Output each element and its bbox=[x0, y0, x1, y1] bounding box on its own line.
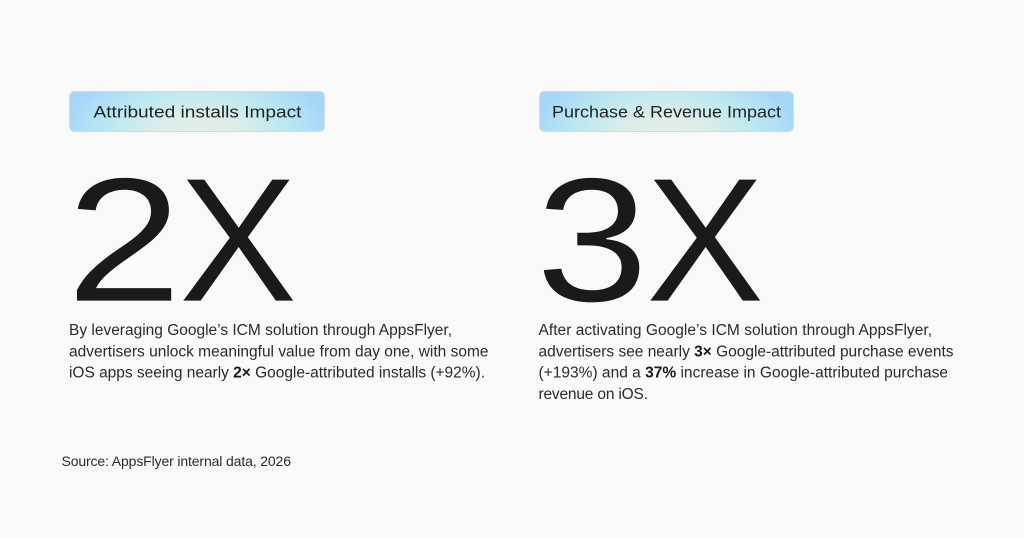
big number: 2X: X bbox=[178, 141, 298, 339]
big number: 3X: 3 bbox=[536, 141, 649, 339]
badge: attributed installs impact: Attributed installs Impact bbox=[94, 102, 302, 122]
text block: purchase description: (+193%) and a 37% increase in Google-attributed purchase bbox=[538, 365, 948, 382]
text block: purchase description: After activating Google’s ICM solution through AppsFlyer, bbox=[538, 322, 932, 339]
text block: installs description: advertisers unlock meaningful value from day one, with some bbox=[69, 343, 488, 360]
text block: installs description: iOS apps seeing nearly 2× Google-attributed installs (+92%). bbox=[69, 365, 485, 382]
panel: attributed installs impact bbox=[66, 92, 488, 382]
big number: 2X: 2 bbox=[66, 142, 182, 339]
text block: purchase description: revenue on iOS. bbox=[538, 386, 648, 403]
text block: purchase description bbox=[538, 322, 954, 403]
text block: installs description: By leveraging Google’s ICM solution through AppsFlyer, bbox=[69, 322, 452, 339]
text block: installs description bbox=[69, 322, 488, 382]
badge: attributed installs impact bbox=[70, 92, 324, 132]
big number: 3X bbox=[536, 141, 765, 339]
source note: Source: AppsFlyer internal data, 2026 bbox=[62, 453, 291, 469]
text block: purchase description: advertisers see nearly 3× Google-attributed purchase events bbox=[538, 343, 954, 360]
panel: purchase and revenue impact bbox=[536, 92, 954, 403]
badge: purchase and revenue impact: Purchase & Revenue Impact bbox=[552, 102, 781, 122]
badge: purchase and revenue impact bbox=[540, 92, 794, 132]
big number: 3X: X bbox=[646, 141, 765, 339]
big number: 2X bbox=[66, 141, 298, 339]
